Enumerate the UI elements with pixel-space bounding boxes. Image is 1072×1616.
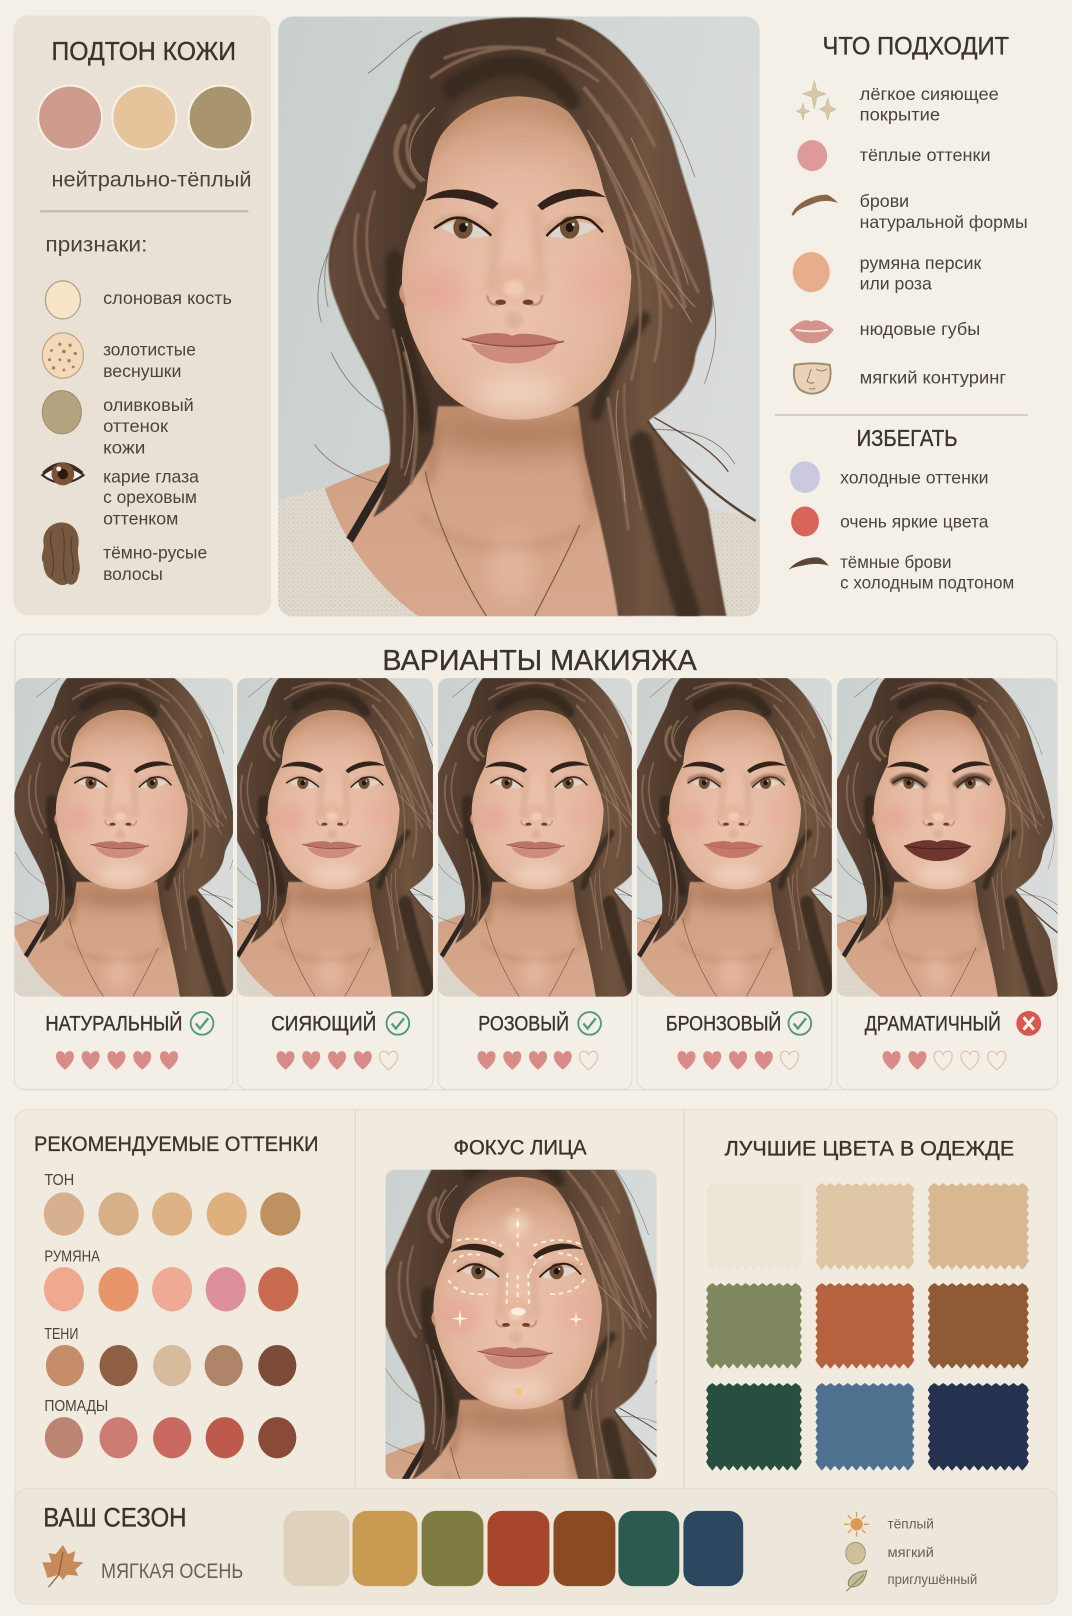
sign: freckles: веснушки: [103, 361, 181, 381]
tip: coverage: лёгкое сияющее: [860, 84, 999, 104]
icon: bright red circle: [791, 507, 819, 536]
fabric swatches: [706, 1183, 1029, 1471]
face focus photo with guides: [386, 1170, 657, 1479]
icon: brown eye: [42, 463, 83, 485]
icon: contour face: [794, 363, 831, 394]
rating: [277, 1051, 398, 1070]
sign: eyes: карие глаза: [103, 466, 199, 486]
icon: cool circle: [790, 461, 820, 493]
legend: muted: приглушённый: [887, 1572, 977, 1587]
avoid: dark brows: тёмные брови: [840, 552, 951, 572]
icon: warm circle: [797, 140, 827, 171]
shades: eyeshadow: ТЕНИ: [44, 1326, 78, 1343]
variant: natural: [14, 678, 234, 1090]
heading: recommended shades: РЕКОМЕНДУЕМЫЕ ОТТЕНКИ: [34, 1131, 319, 1156]
panel: what suits: [775, 34, 1028, 592]
shades: foundation: ТОН: [44, 1172, 74, 1189]
season palette: [283, 1511, 743, 1586]
label: dramatic: ДРАМАТИЧНЫЙ: [865, 1011, 1001, 1036]
icon: soft circle: [846, 1542, 865, 1564]
heading: avoid: ИЗБЕГАТЬ: [857, 425, 958, 451]
icon: maple leaf: [42, 1545, 83, 1587]
heading: your season: ВАШ СЕЗОН: [43, 1502, 187, 1532]
heading: best clothing colours: ЛУЧШИЕ ЦВЕТА В ОДЕЖДЕ: [725, 1135, 1014, 1160]
sign: ivory: слоновая кость: [103, 288, 232, 308]
sign: hair: тёмно-русые: [103, 543, 207, 563]
avoid: bright colours: очень яркие цвета: [840, 512, 989, 532]
legend: warm: тёплый: [887, 1516, 934, 1531]
tip: blush: или роза: [860, 274, 932, 294]
shades: lipstick: [44, 1398, 296, 1458]
tip: coverage: покрытие: [860, 105, 940, 125]
shades: eyeshadow: [44, 1326, 296, 1386]
variant: bronze: [636, 678, 832, 1090]
panel: skin undertone: [13, 15, 271, 615]
sign: olive: оливковый: [103, 395, 194, 415]
tip: lips: нюдовые губы: [860, 319, 980, 339]
icon: natural brow: [792, 195, 838, 215]
icon: lips: [790, 320, 834, 343]
sign: hair: волосы: [103, 564, 163, 584]
legend: soft: мягкий: [887, 1545, 934, 1560]
sign: eyes: с ореховым: [103, 487, 197, 507]
icon: check: [387, 1012, 409, 1035]
main portrait: [278, 16, 760, 616]
icon: check: [191, 1012, 213, 1035]
icon: check: [789, 1012, 811, 1035]
icon: sun: [844, 1512, 869, 1537]
icon: check: [578, 1012, 601, 1035]
avoid: cool shades: холодные оттенки: [840, 467, 989, 487]
rating: [883, 1051, 1006, 1070]
heading: face focus: ФОКУС ЛИЦА: [454, 1134, 587, 1159]
panel: your season: [15, 1489, 1057, 1604]
tip: brows: натуральной формы: [860, 212, 1028, 232]
undertone swatches: [38, 86, 253, 149]
sign: eyes: оттенком: [103, 509, 178, 529]
tip: blush: румяна персик: [860, 253, 982, 273]
label: radiant: СИЯЮЩИЙ: [271, 1011, 376, 1036]
shades: blush: [44, 1248, 298, 1311]
rating: [56, 1051, 178, 1070]
tip: contouring: мягкий контуринг: [860, 367, 1006, 387]
variant: pink: [438, 678, 632, 1090]
panel: recommendations: [14, 1109, 1058, 1498]
sign: olive: оттенок: [103, 416, 168, 436]
undertone name: нейтрально-тёплый: [52, 167, 252, 192]
heading: undertone: ПОДТОН КОЖИ: [52, 38, 236, 66]
icon: cross: [1016, 1011, 1041, 1036]
signs heading: признаки:: [45, 231, 147, 256]
icon: sparkles: [796, 80, 836, 121]
rating: [478, 1051, 598, 1070]
variant: radiant: [236, 678, 434, 1090]
season name: МЯГКАЯ ОСЕНЬ: [101, 1558, 243, 1583]
shades: blush: РУМЯНА: [44, 1248, 101, 1265]
icon: freckles: [42, 333, 83, 378]
tip: warm shades: тёплые оттенки: [860, 145, 991, 165]
label: natural: НАТУРАЛЬНЫЙ: [45, 1011, 182, 1036]
label: bronze: БРОНЗОВЫЙ: [666, 1011, 781, 1036]
icon: wavy hair: [42, 522, 80, 585]
icon: muted leaf: [846, 1571, 867, 1591]
sign: freckles: золотистые: [103, 340, 196, 360]
panel: makeup variants: [0, 634, 1072, 1090]
variant: dramatic: [836, 678, 1058, 1090]
rating: [677, 1051, 799, 1070]
shades: foundation: [44, 1172, 300, 1236]
shades: lipstick: ПОМАДЫ: [44, 1398, 108, 1415]
tip: brows: брови: [860, 191, 909, 211]
heading: what suits: ЧТО ПОДХОДИТ: [823, 34, 1009, 61]
avoid: dark brows: с холодным подтоном: [840, 572, 1014, 592]
icon: olive skin: [42, 391, 81, 434]
icon: ivory skin: [45, 281, 80, 319]
icon: dark brow: [789, 557, 829, 570]
label: pink: РОЗОВЫЙ: [478, 1011, 569, 1036]
icon: peach circle: [793, 252, 830, 292]
heading: variants: ВАРИАНТЫ МАКИЯЖА: [382, 645, 698, 677]
sign: olive: кожи: [103, 437, 145, 457]
